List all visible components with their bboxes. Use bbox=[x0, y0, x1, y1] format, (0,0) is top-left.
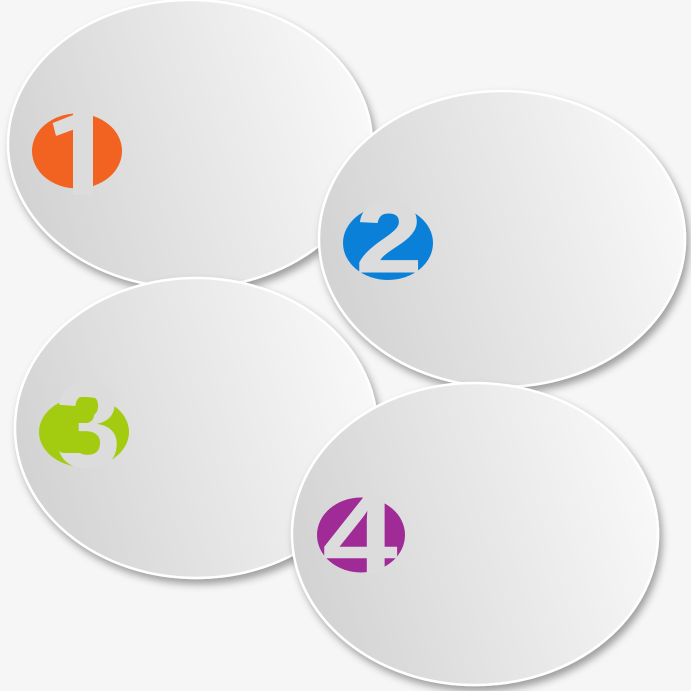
panel: disc 1 bbox=[8, 0, 372, 288]
icon: number 4 badge: 4 bbox=[322, 473, 398, 598]
panel: disc 3 bbox=[15, 278, 377, 578]
panel: disc 4 bbox=[292, 383, 658, 685]
icon: number 2 badge: 2 bbox=[356, 182, 422, 294]
panel: disc 2 bbox=[319, 91, 685, 387]
icon: number 3 badge: 3 bbox=[55, 356, 121, 493]
icon: number 1 badge: 1 bbox=[28, 73, 128, 223]
icon: number 1 badge bbox=[32, 114, 122, 188]
